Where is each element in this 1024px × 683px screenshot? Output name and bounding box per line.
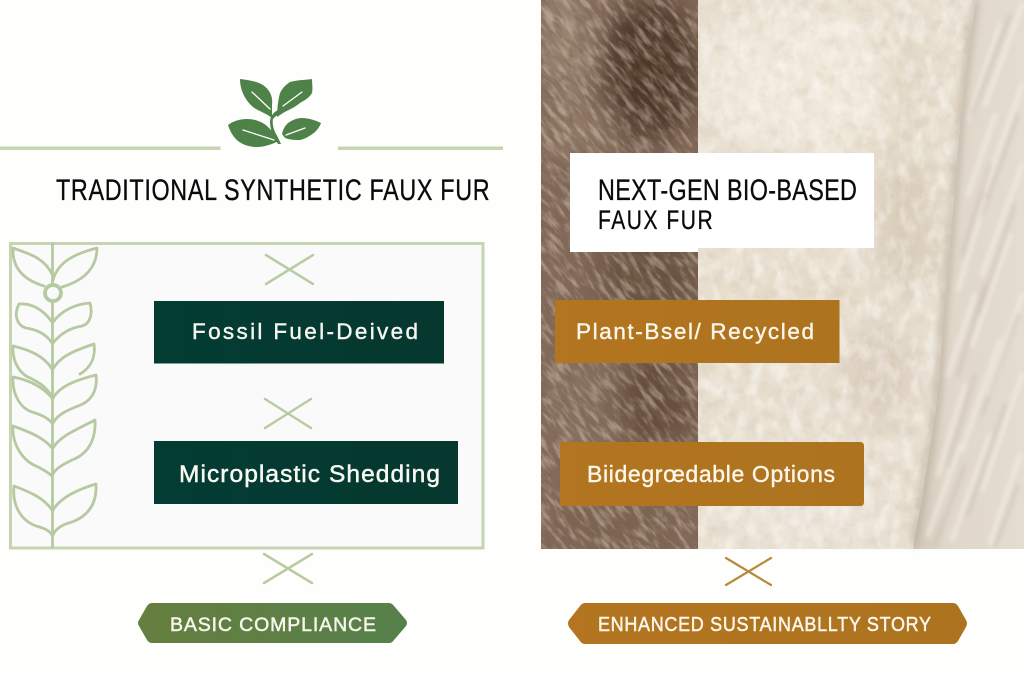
fur swatch: cream (698, 0, 976, 549)
arrow: cross connector to enhanced story (726, 558, 771, 585)
label: biodegradable options: Biidegrœdable Options (587, 461, 835, 487)
icon: botanical frond (13, 244, 97, 547)
label: plant-based recycled (555, 300, 840, 363)
heading: traditional synthetic faux fur: TRADITIONAL SYNTHETIC FAUX FUR (56, 173, 490, 207)
arrow: cross connector to basic compliance (264, 554, 312, 583)
fold shadow (914, 0, 976, 546)
heading card: next-gen bio-based faux fur: FAUX FUR (598, 206, 713, 236)
fur swatch: brown (541, 0, 698, 549)
badge: basic compliance (138, 603, 407, 643)
fur swatch: folded pile (905, 0, 1024, 549)
label: microplastic shedding (154, 441, 458, 504)
heading card: next-gen bio-based faux fur: NEXT-GEN BIO-BASED (598, 173, 857, 207)
fur photo panel (541, 0, 1024, 550)
header divider right (338, 146, 503, 150)
arrow: cross connector middle (265, 399, 311, 428)
label: fossil fuel: Fossil Fuel-Deived (192, 319, 418, 344)
badge: enhanced sustainability story (568, 603, 967, 644)
label: biodegradable options (560, 442, 864, 506)
icon: green leaf sprig (228, 79, 321, 147)
badge: basic compliance: BASIC COMPLIANCE (170, 614, 376, 636)
label: plant-based recycled: Plant-Bsel/ Recycled (576, 319, 814, 344)
label: microplastic shedding: Microplastic Shedding (179, 461, 440, 488)
heading card: next-gen bio-based faux fur (570, 153, 874, 252)
badge: enhanced sustainability story: ENHANCED SUSTAINABLLTY STORY (598, 614, 931, 636)
arrow: cross connector top (266, 255, 313, 284)
header divider left (0, 146, 220, 150)
panel: traditional faux fur (10, 244, 483, 548)
label: fossil fuel (154, 301, 444, 364)
